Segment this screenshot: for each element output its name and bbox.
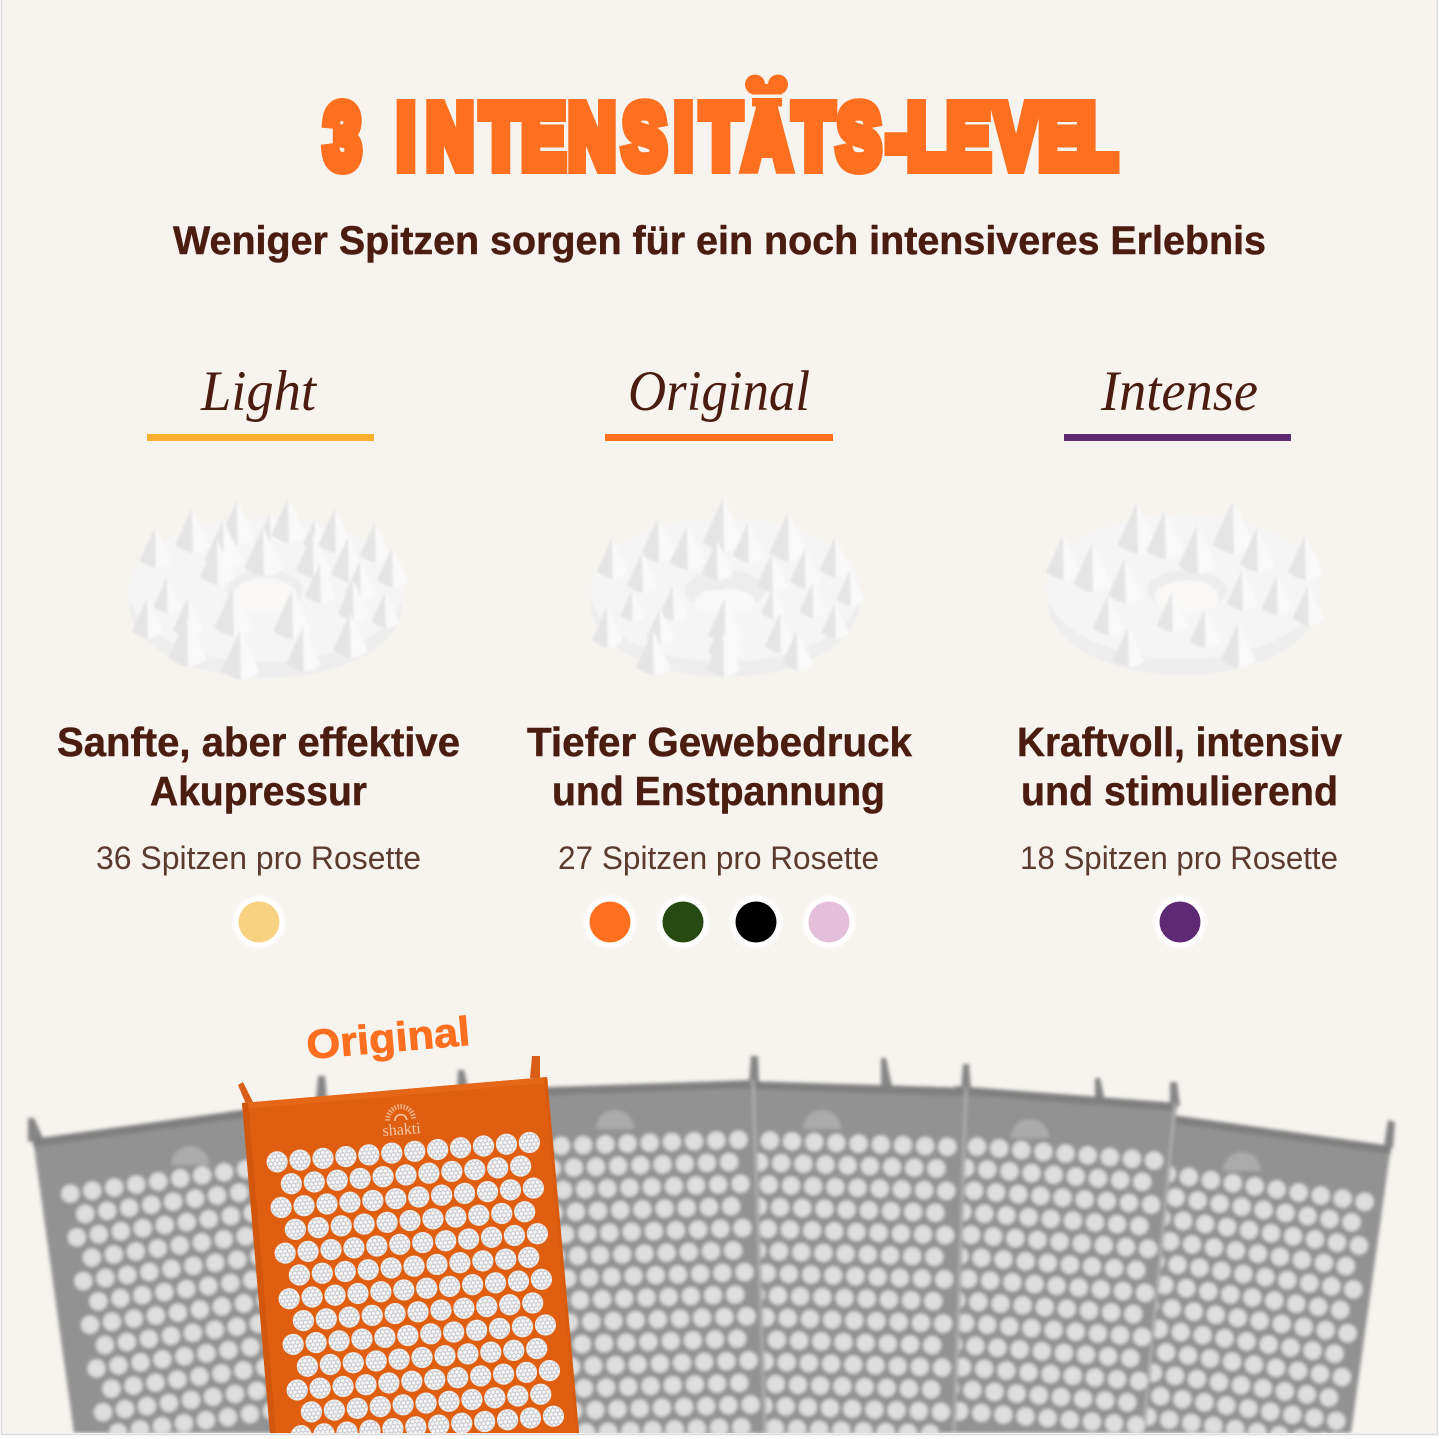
icon: rosette with 36 spikes bbox=[129, 498, 408, 680]
label: Original: Original bbox=[304, 1008, 472, 1068]
orange Original mat bbox=[238, 1056, 579, 1439]
icon: rosette with 18 spikes bbox=[1046, 500, 1324, 675]
underline: Light bbox=[147, 434, 374, 441]
level name: Intense: Intense bbox=[1100, 360, 1258, 423]
colour swatch: Intense bbox=[1154, 896, 1206, 948]
icon: rosette with 27 spikes bbox=[590, 498, 864, 677]
mat tabs bbox=[238, 1056, 540, 1104]
underline: Intense bbox=[1064, 434, 1291, 441]
heading: Light: Sanfte, aber effektive bbox=[57, 719, 460, 765]
colour swatches: Original bbox=[584, 896, 855, 948]
spike count: Light: 36 Spitzen pro Rosette bbox=[96, 840, 421, 876]
heading: Original bbox=[527, 719, 912, 814]
underline: Original bbox=[605, 434, 833, 441]
colour swatch: Light bbox=[233, 896, 285, 948]
mat body bbox=[242, 1077, 579, 1433]
title: 3 INTENSITÄTS-LEVEL bbox=[325, 86, 1117, 187]
acupressure discs bbox=[266, 1131, 564, 1439]
panel: Light bbox=[57, 360, 460, 948]
level name: Original: Original bbox=[628, 360, 810, 423]
logo: shakti bbox=[383, 1104, 421, 1136]
heading: Intense bbox=[1017, 719, 1342, 814]
row of blurred grey mats bbox=[28, 1056, 1395, 1439]
spike count: Intense: 18 Spitzen pro Rosette bbox=[1020, 840, 1338, 876]
level name: Light: Light bbox=[200, 360, 317, 423]
heading: Intense: und stimulierend bbox=[1021, 768, 1338, 814]
logo: shakti: shakti bbox=[382, 1120, 422, 1140]
heading: Light: Akupressur bbox=[150, 768, 367, 814]
heading: Intense: Kraftvoll, intensiv bbox=[1017, 719, 1342, 765]
subtitle: Weniger Spitzen sorgen für ein noch intensiveres Erlebnis bbox=[173, 219, 1266, 263]
heading: Original: Tiefer Gewebedruck bbox=[527, 719, 912, 765]
panel: Intense bbox=[1017, 360, 1342, 948]
heading: Original: und Enstpannung bbox=[552, 768, 885, 814]
heading: Light bbox=[57, 719, 460, 814]
spike count: Original: 27 Spitzen pro Rosette bbox=[558, 840, 879, 876]
panel: Original bbox=[527, 360, 912, 948]
